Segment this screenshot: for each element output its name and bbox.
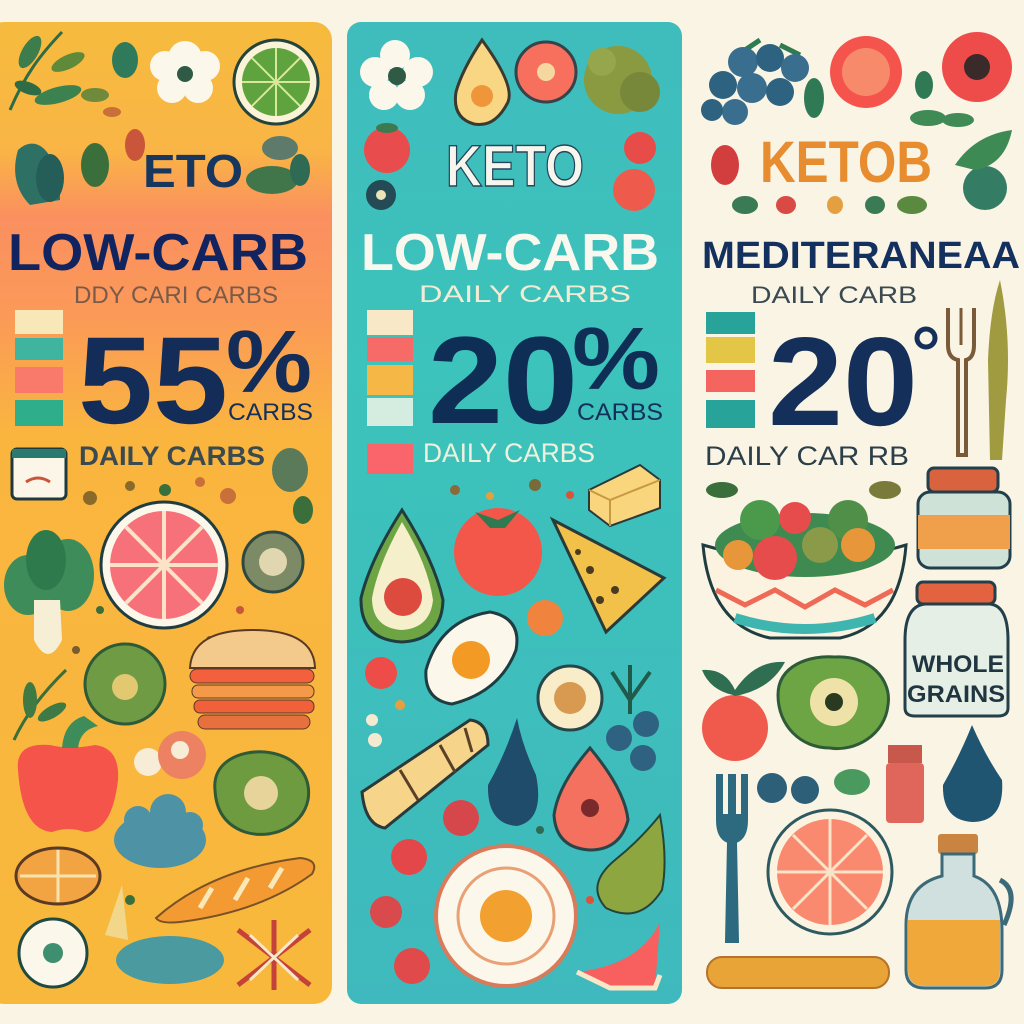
heading: KETOB: KETOB [760,130,932,195]
icon: green flower [85,644,165,724]
icon: plate with egg [436,846,576,986]
icon: burger stack [190,630,315,729]
label: whole grains: WHOLE [912,651,1004,678]
icon: grapefruit top [830,36,902,108]
icon: pear [597,815,665,914]
icon: grapefruit [101,502,227,628]
icon: tomato right [613,132,656,211]
icon: leaf and berry right [955,130,1012,210]
icon: blue vegetable bottom [116,936,224,984]
icon: kiwi [215,752,309,834]
icon: berries [370,800,479,984]
icon: flower [360,40,433,110]
icon: tomato [454,508,542,596]
icon: leafy greens [15,129,310,205]
label: carbs: CARBS [228,399,313,426]
heading: KETO: KETO [446,134,584,199]
icon: olive plant [584,46,660,114]
label: whole grains [907,651,1005,708]
icon: bok choy [4,530,94,654]
icon: bread [362,720,488,828]
heading: ETO: ETO [143,145,243,197]
label: daily carbs: DAILY CARBS [79,441,265,471]
icon: fork [948,308,974,455]
icon: olive dark [366,180,396,210]
icon: specks and herbs mid left [72,448,313,905]
icon: cheese wedge [553,520,664,632]
heading: LOW-CARB: LOW-CARB [361,224,659,282]
icon: blueberries cluster [701,40,809,125]
icon: jar whole grains [905,582,1008,716]
stat: percent sign: % [572,309,660,408]
icon: red bottle [886,745,924,823]
icon: grapefruit large [768,810,892,934]
legend swatches [15,310,63,426]
label: whole grains: GRAINS [907,681,1005,708]
icon: baguette [156,858,314,922]
icon: jar orange [918,468,1010,568]
panel: keto teal [347,22,682,1004]
icon: round slice [538,666,602,730]
icon: bow [238,920,310,990]
icon: cheese block [589,465,660,526]
icon: avocado drop [455,40,509,125]
icon: kiwi flower [778,657,888,749]
icon: herb top left [10,32,138,117]
icon: citrus [516,42,576,102]
icon: oil jar [906,834,1011,988]
icon: strawberry [364,123,410,173]
stat: 55: 55 [78,312,228,450]
stat: 20: 20 [768,311,918,452]
icon: salad bowl [703,500,906,638]
icon: watermelon [577,922,660,988]
icon: flower bottom [19,919,87,987]
icon: tomato with leaves [702,662,785,761]
icon: leaves [804,71,974,127]
icon: small berries [757,769,870,804]
legend swatches [367,310,413,474]
stat: degree mark [917,329,935,347]
label: daily car rb: DAILY CAR RB [705,441,909,471]
icon: rosemary [14,670,69,740]
icon: blueberries [606,665,659,771]
icon: round vegetable [243,532,303,592]
icon: red bell pepper [18,716,118,832]
panel: mediterranean cream [701,32,1020,988]
icon: blue vegetable [114,794,206,868]
icon: baguette bottom [707,957,889,988]
icon: white flower [150,41,220,103]
icon: orange small [527,600,563,636]
icon: fig [554,748,628,850]
icon: fork bottom [717,775,747,942]
icon: pepper left [711,145,758,214]
label: carbs: CARBS [577,399,663,426]
icon: avocado [361,510,443,642]
icon: knife [988,280,1008,460]
heading: MEDITERANEAA: MEDITERANEAA [702,235,1020,277]
icon: leaf bottom [105,885,128,940]
icon: dark pear [488,718,538,826]
icon: tomato slice [942,32,1012,102]
icon: dark avocado [943,725,1002,822]
icon: small tomato [365,657,397,689]
stat: 20: 20 [428,312,578,450]
label: daily carbs: DAILY CARBS [423,438,595,468]
subheading: daily carb: DAILY CARB [751,282,917,309]
icon: herbs beside bowl [706,481,901,499]
icon: specks [366,479,594,904]
icon: egg [426,612,517,704]
stat: percent sign: % [226,312,312,411]
heading: LOW-CARB: LOW-CARB [8,224,308,282]
subheading: daily carbs garbled: DDY CARI CARBS [74,282,278,309]
panel: low-carb orange [0,22,332,1004]
icon: row of small foods [776,196,927,214]
icon: orange slice [16,848,100,904]
subheading: daily carbs: DAILY CARBS [419,281,631,308]
icon: jar [12,449,66,499]
icon: mixed items [134,731,206,779]
legend swatches [706,312,755,428]
icon: lime [234,40,318,124]
